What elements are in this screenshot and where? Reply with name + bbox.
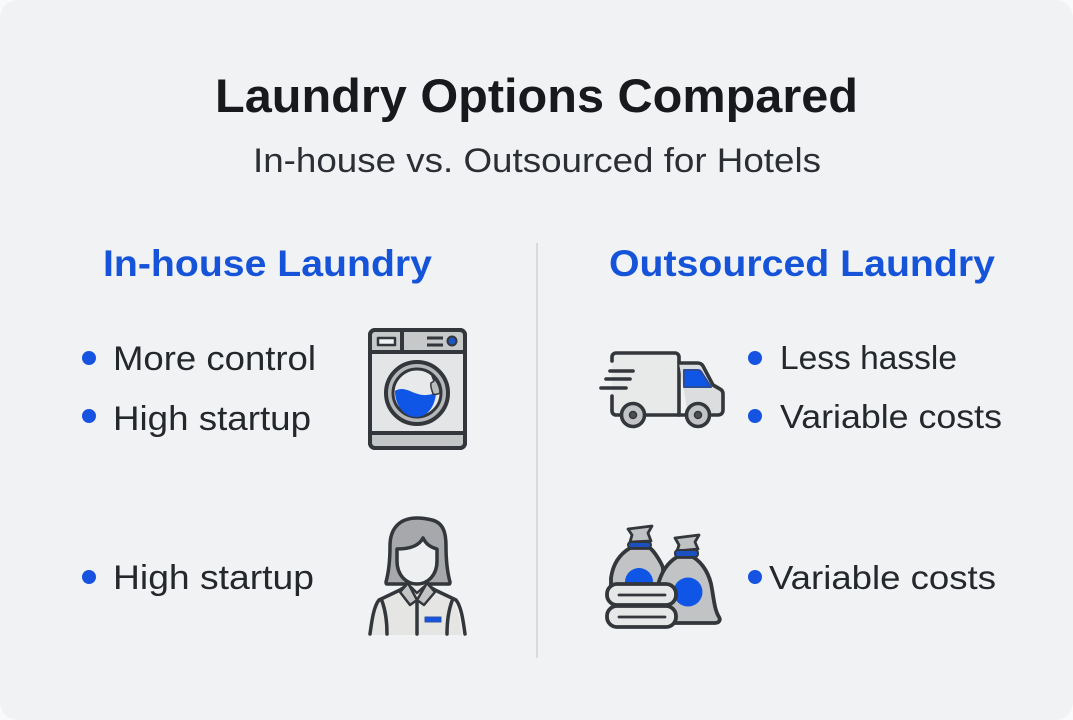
bullet: high startup: High startup — [113, 400, 311, 438]
heading: outsourced laundry: Outsourced Laundry — [609, 243, 995, 284]
icon: delivery truck — [601, 353, 723, 426]
panel: outsourced laundry — [601, 243, 1002, 627]
bullet: less hassle: Less hassle — [780, 339, 957, 376]
icon: laundry bags — [607, 526, 720, 627]
title: Laundry Options Compared — [215, 69, 858, 122]
icon: washing machine — [370, 330, 465, 448]
panel: in-house laundry — [82, 243, 465, 635]
heading: in-house laundry: In-house Laundry — [103, 243, 432, 284]
bullet: variable costs second: Variable costs — [769, 559, 996, 596]
bullet: more control: More control — [113, 340, 316, 378]
bullet: high startup second: High startup — [113, 559, 314, 597]
subtitle: In-house vs. Outsourced for Hotels — [253, 142, 821, 180]
bullet: variable costs: Variable costs — [780, 398, 1002, 435]
icon: staff member — [370, 518, 465, 635]
